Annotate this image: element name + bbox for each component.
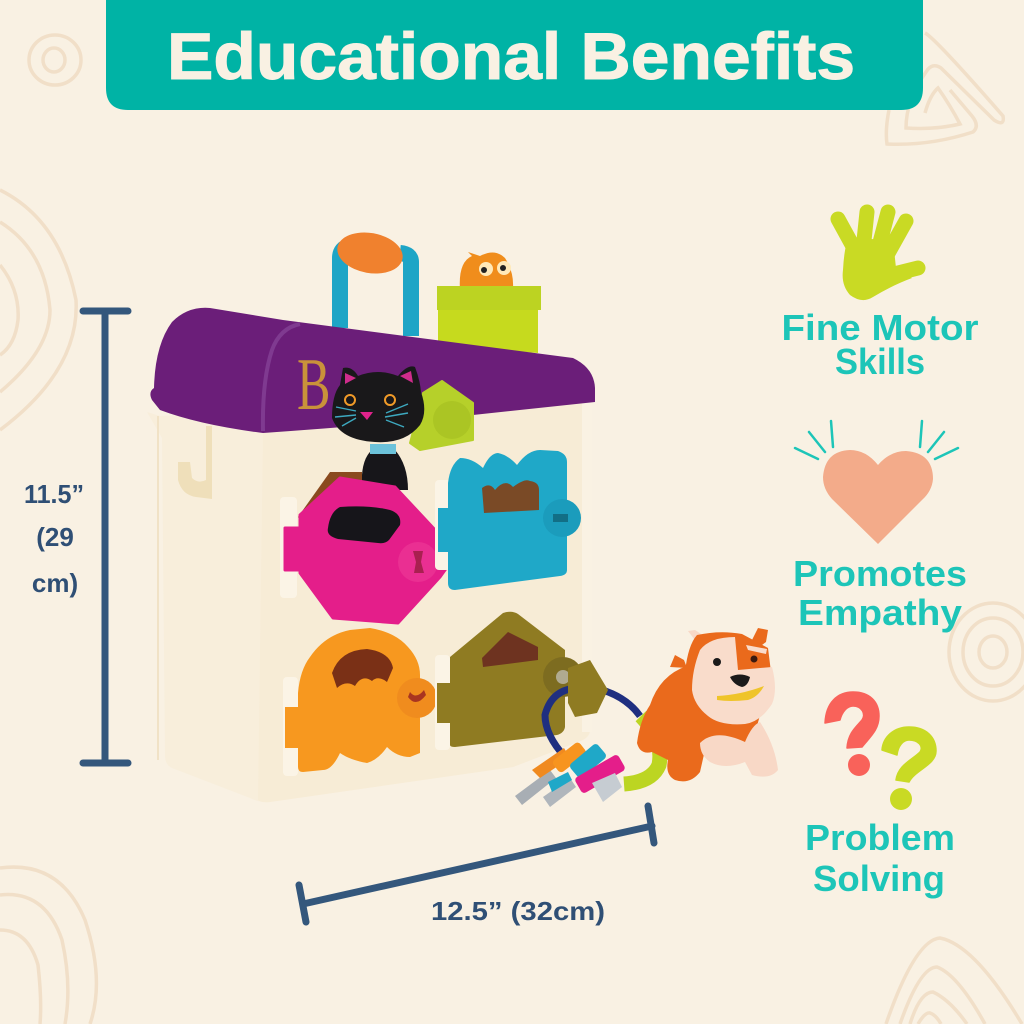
label: Empathy <box>798 592 962 633</box>
case body <box>147 400 590 802</box>
label: Promotes <box>793 553 967 594</box>
label: Solving <box>813 858 945 899</box>
height label: 11.5” <box>24 479 84 509</box>
label <box>782 307 978 382</box>
benefit: problem solving <box>805 692 955 899</box>
label <box>793 553 967 633</box>
blue door <box>435 450 581 590</box>
green house badge <box>410 381 473 450</box>
icon: hand <box>838 212 918 300</box>
title banner <box>106 0 923 110</box>
title: Educational Benefits <box>167 19 855 93</box>
icon: question marks <box>825 692 936 810</box>
keys on ring <box>515 660 660 807</box>
B logo: B. <box>297 344 343 426</box>
orange door <box>283 628 437 776</box>
height label: (29 <box>36 522 74 552</box>
plush bulldog <box>637 628 778 781</box>
label: Skills <box>835 341 925 382</box>
toy vet carrying case <box>147 228 595 802</box>
handle <box>334 228 411 336</box>
height label: cm) <box>32 568 78 598</box>
benefit: fine motor skills <box>782 212 978 382</box>
black cat <box>332 366 424 490</box>
pink door <box>280 472 450 623</box>
label: Fine Motor <box>782 307 978 348</box>
owl in chimney <box>437 252 541 353</box>
olive door <box>435 612 583 750</box>
benefit: promotes empathy <box>793 421 967 633</box>
width dimension line <box>299 806 654 922</box>
purple roof <box>150 308 595 433</box>
icon: heart with rays <box>795 421 958 544</box>
height label <box>24 479 84 598</box>
label: Problem <box>805 817 955 858</box>
width label: 12.5” (32cm) <box>431 896 605 926</box>
height dimension line <box>83 311 128 763</box>
label <box>805 817 955 899</box>
